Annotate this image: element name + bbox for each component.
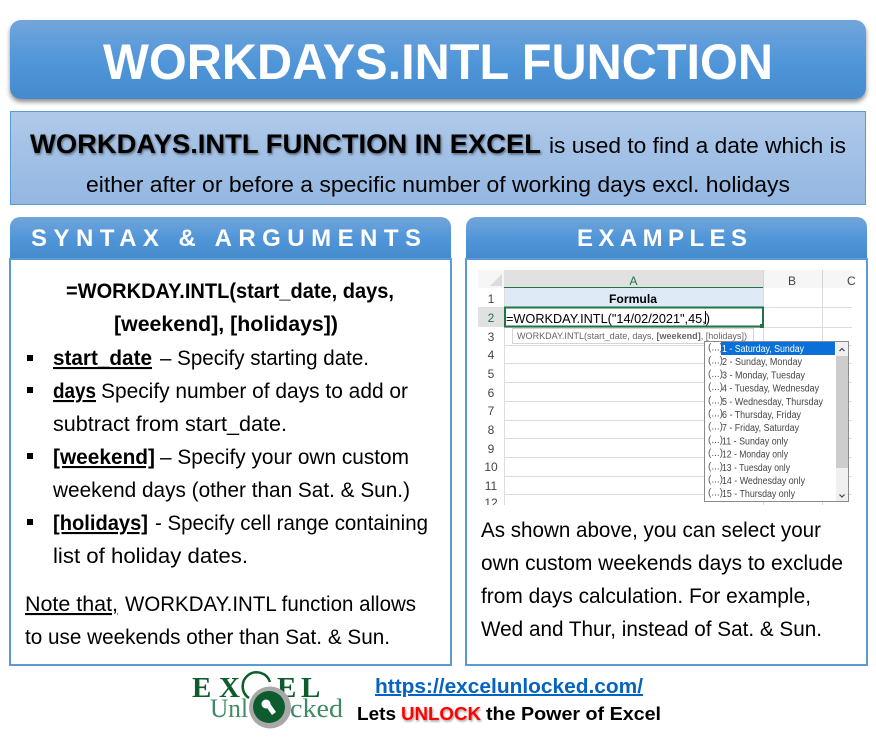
logo: Excel Unlocked: Unl xyxy=(210,694,248,723)
title banner xyxy=(10,20,866,99)
argument: holidays: [holidays] xyxy=(53,512,148,535)
example explanation: Wed and Thur, instead of Sat. & Sun. xyxy=(481,618,822,641)
argument: holidays: list of holiday dates. xyxy=(53,545,248,568)
row numbers: 3 xyxy=(488,330,495,344)
row numbers: 7 xyxy=(488,404,495,418)
note xyxy=(25,593,416,649)
weekend dropdown list: 11 - Sunday only xyxy=(722,436,788,447)
column headers: A xyxy=(629,274,638,288)
weekend dropdown list: (...) xyxy=(708,488,723,499)
logo: Excel Unlocked: L xyxy=(301,672,320,704)
panel: examples xyxy=(466,217,867,665)
title banner: WORKDAYS.INTL FUNCTION xyxy=(103,34,773,90)
argument: weekend: – Specify your own custom xyxy=(160,446,409,469)
formula header cell: Formula xyxy=(609,292,657,306)
heading: syntax and arguments: SYNTAX & ARGUMENTS xyxy=(31,225,421,252)
heading: syntax and arguments xyxy=(10,217,451,258)
argument: start_date: start_date xyxy=(53,347,152,370)
argument: weekend: [weekend] xyxy=(53,446,155,469)
argument: days: days xyxy=(53,380,96,403)
weekend dropdown list: 3 - Monday, Tuesday xyxy=(722,370,805,381)
argument: start_date xyxy=(27,347,369,370)
weekend dropdown list: 13 - Tuesday only xyxy=(722,463,790,474)
row numbers: 6 xyxy=(488,386,495,400)
column headers: B xyxy=(788,274,796,288)
weekend dropdown list: (...) xyxy=(708,382,723,393)
argument: start_date: – Specify starting date. xyxy=(160,347,369,370)
row numbers xyxy=(478,292,504,510)
column headers: C xyxy=(847,274,856,288)
definition panel xyxy=(10,112,866,204)
row numbers: 12 xyxy=(484,496,498,510)
example explanation: from days calculation. For example, xyxy=(481,585,811,608)
logo: Excel Unlocked: E xyxy=(192,672,211,704)
row numbers: 11 xyxy=(485,479,498,493)
tagline xyxy=(357,703,661,724)
weekend dropdown list: 6 - Thursday, Friday xyxy=(722,410,801,421)
weekend dropdown list: 14 - Wednesday only xyxy=(722,476,805,487)
argument: holidays xyxy=(27,512,428,568)
formula header cell xyxy=(505,288,763,307)
weekend dropdown list: (...) xyxy=(708,408,723,420)
weekend dropdown list: 12 - Monday only xyxy=(722,450,788,461)
example explanation: own custom weekends days to exclude xyxy=(481,552,843,575)
argument: days: Specify number of days to add or xyxy=(101,380,408,403)
row numbers: 2 xyxy=(488,311,495,325)
function tooltip: WORKDAY.INTL(start_date, days, [weekend], [holidays]) xyxy=(517,331,747,342)
logo: Excel Unlocked: X xyxy=(219,672,240,704)
weekend dropdown list: (...) xyxy=(708,461,723,472)
definition panel: either after or before a specific number of working days excl. holidays xyxy=(86,172,790,197)
argument: days xyxy=(27,380,408,436)
argument: weekend: weekend days (other than Sat. & Sun.) xyxy=(52,479,410,502)
heading: examples: EXAMPLES xyxy=(577,225,747,252)
weekend dropdown list: (...) xyxy=(708,369,723,380)
syntax formula xyxy=(66,280,394,336)
weekend dropdown list: (...) xyxy=(708,474,723,486)
weekend dropdown list: (...) xyxy=(708,356,723,367)
weekend dropdown list: (...) xyxy=(708,342,723,354)
weekend dropdown list: 4 - Tuesday, Wednesday xyxy=(722,384,819,395)
syntax formula: [weekend], [holidays]) xyxy=(114,313,338,336)
example explanation xyxy=(481,519,843,641)
excel screenshot xyxy=(478,269,856,511)
definition panel: is used to find a date which is xyxy=(549,133,846,158)
active formula cell xyxy=(505,308,764,328)
definition panel: WORKDAYS.INTL FUNCTION IN EXCEL xyxy=(30,129,541,159)
weekend dropdown list: 5 - Wednesday, Thursday xyxy=(722,397,823,408)
row numbers: 4 xyxy=(488,348,495,362)
argument: weekend xyxy=(27,446,410,502)
tagline: Lets xyxy=(357,703,396,724)
logo: Excel Unlocked: cked xyxy=(290,694,343,723)
weekend dropdown list: 7 - Friday, Saturday xyxy=(722,423,799,434)
weekend dropdown list: 1 - Saturday, Sunday xyxy=(722,344,804,355)
weekend dropdown list xyxy=(704,342,848,502)
grid lines xyxy=(504,288,852,505)
weekend dropdown list: (...) xyxy=(708,422,723,433)
tagline: the Power of Excel xyxy=(486,703,661,724)
weekend dropdown list: (...) xyxy=(708,395,723,406)
row numbers: 5 xyxy=(488,367,495,381)
argument: holidays: - Specify cell range containing xyxy=(155,512,428,535)
example explanation: As shown above, you can select your xyxy=(481,519,821,542)
tagline: UNLOCK xyxy=(401,703,482,724)
row numbers: 9 xyxy=(488,442,495,456)
active formula cell: =WORKDAY.INTL("14/02/2021",45,) xyxy=(506,311,710,326)
column headers xyxy=(478,270,856,288)
syntax formula: =WORKDAY.INTL(start_date, days, xyxy=(66,280,394,303)
logo: Excel Unlocked: E xyxy=(277,672,296,704)
note: to use weekends other than Sat. & Sun. xyxy=(25,626,390,649)
weekend dropdown list: 2 - Sunday, Monday xyxy=(722,357,802,368)
note: Note that, xyxy=(25,593,118,616)
website link: https://excelunlocked.com/ xyxy=(375,676,643,698)
note: WORKDAY.INTL function allows xyxy=(125,593,416,616)
logo: Excel Unlocked xyxy=(192,672,343,728)
weekend dropdown list: 15 - Thursday only xyxy=(722,489,795,500)
row numbers: 8 xyxy=(488,423,495,437)
panel: syntax and arguments xyxy=(10,217,451,665)
heading: examples xyxy=(466,217,867,258)
row numbers: 1 xyxy=(488,292,495,306)
weekend dropdown list: (...) xyxy=(708,435,723,446)
weekend dropdown list: (...) xyxy=(708,448,723,459)
icon: keyhole lock xyxy=(249,686,291,728)
argument: days: subtract from start_date. xyxy=(53,413,287,436)
row numbers: 10 xyxy=(484,460,498,474)
